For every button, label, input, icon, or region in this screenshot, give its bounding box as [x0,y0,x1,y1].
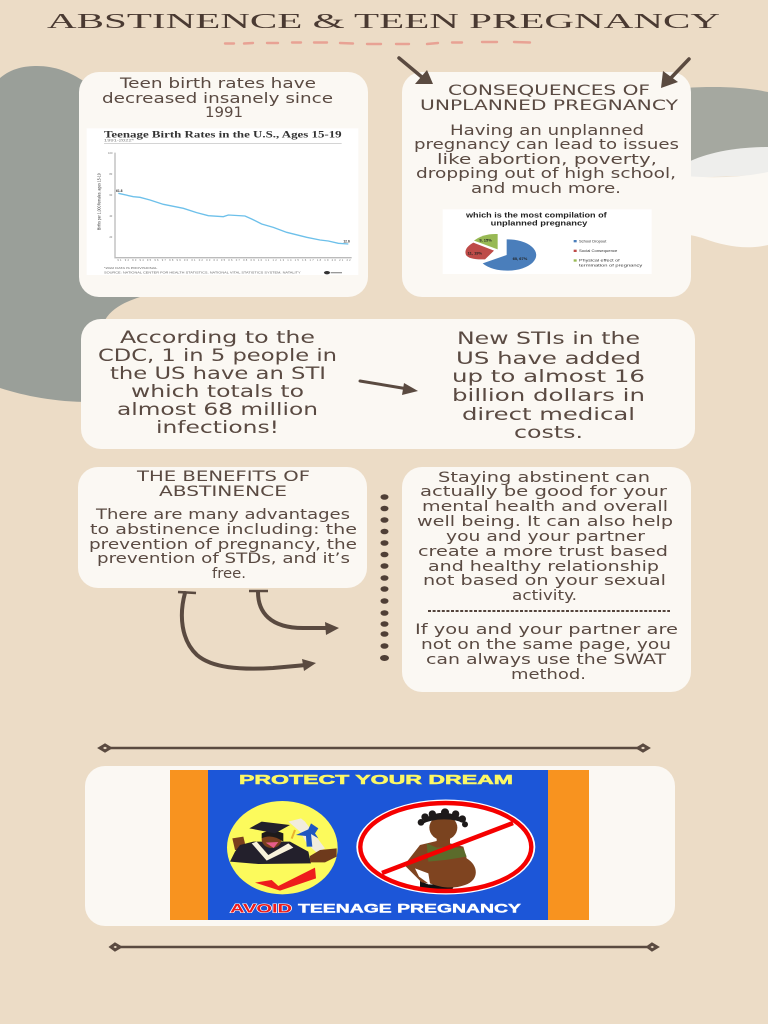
banner footer text: AVOID [230,902,292,916]
line chart: teenage birth rates: 91 92 93 94 95 96 97 98 99 00 01 02 03 04 05 06 07 08 09 10 11 12 13 14 15 16 17 18 19 20 21 22 [117,258,351,262]
text: CDC STI statistic: According to the [120,328,315,348]
arrow: top right pointing to consequences [661,59,689,88]
line chart: teenage birth rates: Births per 1,000 females, ages 15-19 [97,173,102,230]
divider: lower [111,944,657,950]
line chart: teenage birth rates: 12.6 [343,240,350,244]
text: birth rates heading: Teen birth rates have [119,76,316,92]
text: benefits body [89,507,357,582]
text: STI medical costs: US have added [456,349,641,369]
text: benefits body: prevention of pregnancy, the [89,537,357,553]
line chart: teenage birth rates: 1991-2022* [104,138,135,143]
pie chart: unplanned pregnancy: School Dropout [579,238,607,243]
pie chart: unplanned pregnancy: Social Consequence [579,248,618,253]
panel: consequences [402,72,691,297]
text: mental health benefits: and healthy relationship [428,559,659,575]
text: SWAT method: If you and your partner are [415,622,678,638]
text: benefits body: free. [212,566,246,582]
heading: consequences: UNPLANNED PREGNANCY [420,98,678,114]
text: STI medical costs: direct medical [462,405,635,425]
text: SWAT method: method. [511,667,586,683]
text: consequences body [414,123,679,197]
line chart: teenage birth rates [87,128,358,275]
arrow: long curved connector [178,592,316,671]
text: STI medical costs: billion dollars in [452,386,645,406]
text: benefits body: There are many advantages [95,507,350,523]
text: consequences body: Having an unplanned [450,123,644,139]
arrow: top left pointing to consequences [399,58,433,84]
text: mental health benefits: you and your partner [446,529,645,545]
divider: upper [100,745,648,751]
text: SWAT method: not on the same page, you [421,637,671,653]
line chart: teenage birth rates: 60 [109,193,113,197]
pie chart: unplanned pregnancy: termination of pregnancy [579,262,642,267]
line chart: teenage birth rates: *2022 DATA IS PROVISIONAL [104,266,158,270]
text: mental health benefits: mental health and overall [422,499,668,515]
text: consequences body: dropping out of high school, [416,166,676,182]
line chart: teenage birth rates: SOURCE: NATIONAL CENTER FOR HEALTH STATISTICS, NATIONAL VITAL STATISTICS SYSTEM, NATALITY [104,270,301,274]
illustration: prohibited teen pregnancy sign [356,800,535,894]
text: benefits body: to abstinence including: the [90,522,357,538]
text: STI medical costs [452,329,645,443]
pie chart: unplanned pregnancy: which is the most compilation of [465,211,607,220]
text: mental health benefits: Staying abstinent can [438,470,650,486]
banner heading: PROTECT YOUR DREAM [239,773,513,787]
text: CDC STI statistic: infections! [156,418,279,438]
panel: benefits of abstinence [78,467,367,588]
text: SWAT method [415,622,678,683]
title underline: dashed accent [225,42,530,44]
text: mental health benefits: well being. It can also help [417,514,673,530]
text: CDC STI statistic: the US have an STI [110,364,326,384]
illustration: graduate with check mark [227,801,338,894]
text: birth rates heading [102,76,333,121]
banner footer text [230,902,521,916]
text: CDC STI statistic [98,328,337,438]
text: STI medical costs: up to almost 16 [452,367,645,387]
poster: protect your dream banner [170,770,589,920]
arrow: STI statistic to cost [360,381,418,395]
text: mental health benefits: not based on your sexual [423,573,666,589]
title: ABSTINENCE & TEEN PREGNANCY [47,9,720,33]
text: CDC STI statistic: almost 68 million [117,400,318,420]
line chart: teenage birth rates: Teenage Birth Rates in the U.S., Ages 15-19 [104,130,342,140]
pie chart: unplanned pregnancy: 60, 67% [513,256,528,261]
panel: protect your dream [85,766,675,926]
line chart: teenage birth rates: 100 [108,151,113,155]
pie chart: unplanned pregnancy [443,209,652,274]
line chart: teenage birth rates: 20 [109,235,113,239]
text: benefits body: prevention of STDs, and it’s [97,551,350,567]
banner footer text: TEENAGE PREGNANCY [298,902,521,916]
text: CDC STI statistic: which totals to [131,382,304,402]
background blobs: right wave [685,87,768,247]
pie chart: unplanned pregnancy: 9, 15% [479,238,492,243]
text: birth rates heading: 1991 [205,105,243,121]
arrow: short curved connector [249,591,339,635]
heading: benefits: ABSTINENCE [159,484,287,500]
dotted vertical separator [380,494,389,661]
text: consequences body: pregnancy can lead to issues [414,137,679,153]
text: consequences body: like abortion, poverty, [437,152,657,168]
text: STI medical costs: costs. [514,423,583,443]
line chart: teenage birth rates: 40 [109,214,113,218]
panel: birth rates [79,72,368,297]
panel: STI facts [81,319,695,449]
heading: benefits: THE BENEFITS OF [136,469,310,485]
text: CDC STI statistic: CDC, 1 in 5 people in [98,346,337,366]
pie chart: unplanned pregnancy: Physical effect of [579,258,621,263]
text: mental health benefits [417,470,673,604]
pie chart: unplanned pregnancy: 11, 19% [468,250,483,255]
text: mental health benefits: actually be good for your [420,484,667,500]
heading: consequences [420,83,678,114]
heading: benefits [136,469,310,500]
text: consequences body: and much more. [471,181,621,197]
panel: abstinence and relationships [402,467,691,692]
text: mental health benefits: create a more trust based [418,544,668,560]
background blob: left grey [0,66,140,402]
pie chart: unplanned pregnancy: unplanned pregnancy [491,219,588,228]
heading: consequences: CONSEQUENCES OF [448,83,650,99]
text: mental health benefits: activity. [512,588,577,604]
text: SWAT method: can always use the SWAT [426,652,666,668]
line chart: teenage birth rates: 61.8 [116,189,123,193]
text: STI medical costs: New STIs in the [457,329,640,349]
text: birth rates heading: decreased insanely since [102,91,333,107]
line chart: teenage birth rates: 80 [109,172,113,176]
